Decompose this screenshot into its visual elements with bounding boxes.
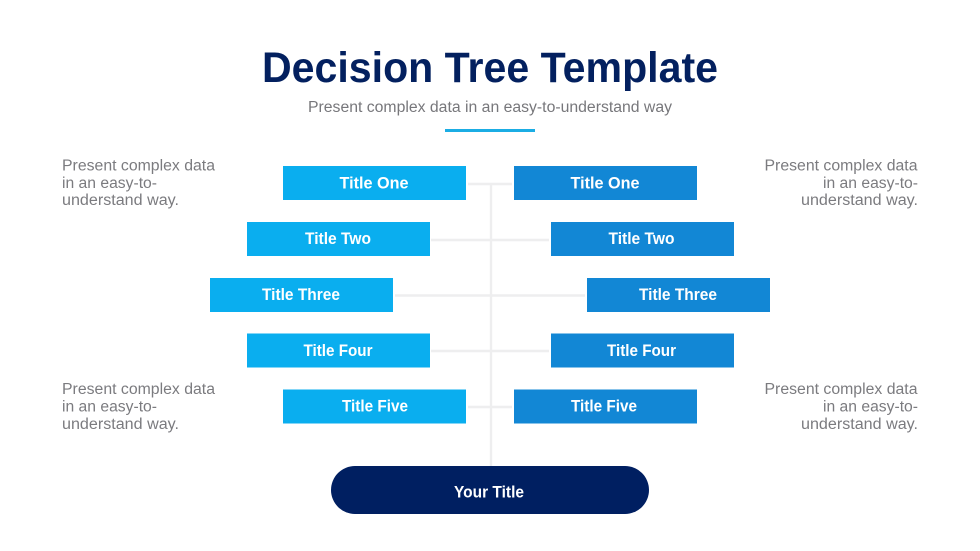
text block: top right: in an easy-to- [823, 175, 918, 192]
text block: bottom left: Present complex data [62, 381, 215, 398]
right box: title four: Title Four [607, 342, 677, 360]
connector tree [395, 184, 585, 467]
left box: title five [283, 390, 466, 424]
text block: top right [764, 158, 918, 209]
left box: title one: Title One [340, 174, 408, 192]
subtitle: Present complex data in an easy-to-understand way [308, 99, 672, 116]
left box: title four: Title Four [304, 342, 373, 360]
right box: title two: Title Two [608, 230, 674, 248]
root pill: your title [331, 466, 649, 514]
right box: title four [551, 334, 734, 368]
text block: bottom right [764, 381, 918, 433]
text block: top left: Present complex data [62, 158, 215, 174]
right column of title boxes [514, 166, 770, 424]
right box: title five [514, 390, 697, 424]
text block: top left: understand way. [62, 192, 179, 209]
right box: title one [514, 166, 697, 200]
text block: bottom left [62, 381, 215, 433]
text block: top left [62, 158, 215, 209]
right box: title five: Title Five [571, 398, 637, 416]
right box: title two [551, 222, 734, 256]
text block: top right: Present complex data [764, 158, 918, 174]
right box: title one: Title One [570, 174, 640, 192]
right box: title three: Title Three [639, 286, 717, 304]
text block: bottom right: in an easy-to- [823, 398, 918, 416]
root pill: your title: Your Title [454, 484, 524, 502]
left box: title two [247, 222, 430, 256]
text block: bottom left: understand way. [62, 416, 179, 433]
text block: bottom right: understand way. [801, 416, 918, 433]
left box: title five: Title Five [342, 398, 408, 416]
text block: bottom left: in an easy-to- [62, 398, 157, 416]
left box: title two: Title Two [305, 230, 371, 248]
title: Decision Tree Template [262, 44, 718, 92]
left box: title three: Title Three [262, 286, 340, 304]
text block: top right: understand way. [801, 192, 918, 209]
left box: title four [247, 334, 430, 368]
left box: title one [283, 166, 466, 200]
title underline accent [445, 129, 535, 132]
text block: top left: in an easy-to- [62, 175, 157, 192]
left column of title boxes [210, 166, 466, 424]
right box: title three [587, 278, 770, 312]
left box: title three [210, 278, 393, 312]
text block: bottom right: Present complex data [764, 381, 918, 398]
